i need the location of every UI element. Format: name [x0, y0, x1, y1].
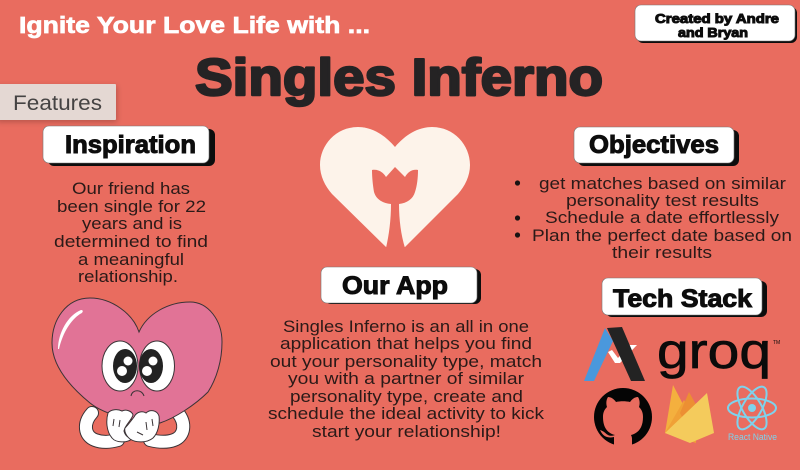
mouth	[131, 391, 144, 396]
features tab: Features	[13, 91, 102, 115]
text: inspiration body: years and is	[82, 215, 182, 233]
text: our app body: schedule the ideal activity to kick	[268, 405, 545, 423]
icon: sad heart character	[52, 298, 222, 442]
heading: our app	[321, 267, 481, 304]
credit badge: and Bryan	[678, 25, 748, 40]
icon: react native logo	[728, 382, 777, 442]
text: our app body: out your personality type, match	[270, 353, 542, 371]
list: objectives: their results	[612, 244, 712, 262]
right arm	[150, 413, 183, 442]
right hand	[125, 411, 159, 442]
heading: objectives	[574, 127, 739, 166]
icon: groq logo: TM	[773, 340, 780, 346]
text: our app body: personality type, create and	[290, 388, 523, 406]
subtitle: Ignite Your Love Life with ...	[19, 12, 370, 38]
text: inspiration body: a meaningful	[78, 251, 184, 269]
icon: aceternity logo	[584, 327, 645, 381]
credit badge: Created by Andre	[655, 11, 779, 26]
text: our app body: you with a partner of similar	[288, 370, 525, 388]
text: our app body: application that helps you find	[280, 335, 532, 353]
heading: inspiration	[43, 126, 215, 166]
icon: react native logo: React Native	[728, 432, 777, 442]
text: inspiration body: Our friend has	[72, 180, 190, 198]
highlight	[58, 310, 83, 349]
text: our app body	[268, 318, 545, 441]
list: objectives: Plan the perfect date based on	[532, 227, 792, 245]
list: objectives: Schedule a date effortlessly	[545, 209, 780, 227]
text: inspiration body: determined to find	[54, 233, 208, 251]
heading: inspiration: Inspiration	[65, 131, 196, 159]
heading: our app: Our App	[342, 272, 448, 300]
heading: objectives: Objectives	[589, 131, 719, 159]
list: objectives: personality test results	[566, 192, 759, 210]
list: objectives	[515, 175, 792, 262]
icon: firebase logo	[665, 385, 714, 443]
eyes	[102, 341, 138, 391]
left hand	[107, 410, 133, 442]
text: inspiration body	[54, 180, 208, 286]
heading: tech stack: Tech Stack	[613, 285, 752, 313]
heading: tech stack	[602, 278, 767, 317]
text: our app body: Singles Inferno is an all in one	[283, 318, 529, 336]
finger lines	[113, 419, 153, 435]
title: Singles Inferno	[195, 49, 603, 107]
features tab	[0, 84, 116, 120]
icon: groq logo: groq	[657, 323, 771, 379]
list: objectives: get matches based on similar	[539, 175, 787, 193]
heart body	[52, 298, 222, 423]
icon: github logo	[594, 388, 652, 446]
left arm	[86, 413, 118, 442]
credit badge	[635, 5, 797, 43]
text: inspiration body: relationship.	[78, 268, 178, 286]
icon: heart with tulip	[320, 127, 470, 248]
text: inspiration body: been single for 22	[57, 198, 206, 216]
text: our app body: start your relationship!	[312, 423, 501, 441]
